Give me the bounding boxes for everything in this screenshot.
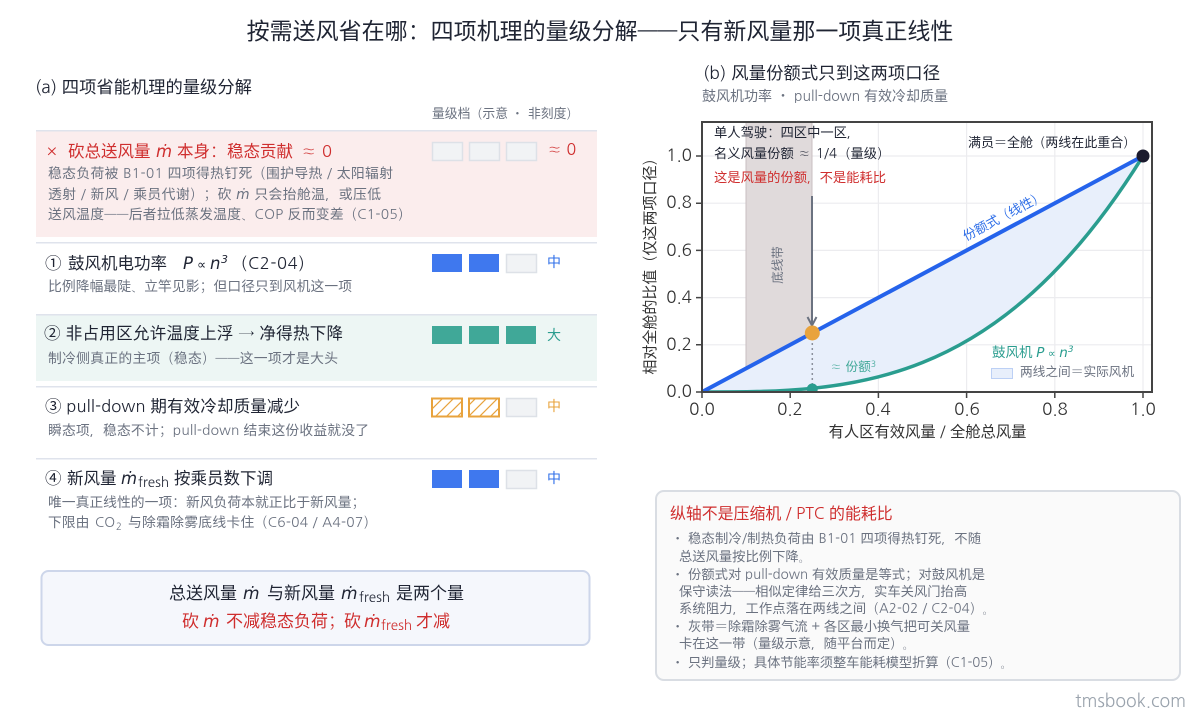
callout: two different airflows: 砍	[182, 613, 199, 630]
notes panel	[656, 491, 1180, 680]
row 0: cutting total airflow: 透射 / 新风 / 乘员代谢）；砍 ṁ 只会抬舱温，或压低	[48, 183, 381, 203]
ticks	[696, 156, 1143, 398]
share line	[702, 156, 1143, 392]
row 1: blower power: （C2-04）	[232, 255, 314, 272]
row 1: blower power: 3	[221, 253, 228, 266]
annotation: share cubed: ≈ 份额	[830, 360, 871, 373]
dotted guide	[811, 333, 813, 392]
row 1: blower power: 中	[547, 255, 561, 270]
callout: two different airflows	[42, 571, 590, 645]
panel a: mechanism breakdown	[35, 78, 597, 532]
row 4: fresh air: ṁ	[121, 469, 137, 488]
panel b subtitle: ·	[776, 86, 790, 106]
chart: airflow share vs ratio	[641, 122, 1156, 440]
callout: two different airflows: 是两个量	[396, 584, 464, 602]
notes panel: ·	[671, 564, 684, 583]
row 4: fresh air: 唯一真正线性的一项：新风负荷本就正比于新风量；	[48, 491, 365, 511]
y tick labels: 0.8	[666, 194, 692, 211]
x tick labels: 0.0	[689, 401, 715, 418]
annotation: share cubed: 3	[871, 360, 876, 369]
blower curve	[702, 156, 1143, 392]
annotation: single driver: ≈	[798, 147, 810, 160]
annotation: full cabin: 满员＝全舱（两线在此重合）	[968, 132, 1135, 151]
row 2: unoccupied zone temperature	[36, 314, 597, 381]
notes panel: ·	[671, 616, 684, 635]
title: 按需送风省在哪：四项机理的量级分解——只有新风量那一项真正线性	[247, 12, 953, 46]
panel a heading: (a) 四项省能机理的量级分解	[35, 78, 252, 96]
annotation: single driver: （量级）	[838, 146, 890, 160]
y axis label: 相对全舱的比值（仅这两项口径）	[641, 151, 658, 375]
legend: 两线之间＝实际风机	[1020, 361, 1134, 380]
notes panel: ·	[671, 652, 684, 671]
panel b heading: (b) 风量份额式只到这两项口径	[703, 64, 940, 82]
x axis label: 有人区有效风量 / 全舱总风量	[829, 423, 1026, 440]
row 1: blower power: 比例降幅最陡、立竿见影；但口径只到风机这一项	[48, 275, 352, 295]
row 0: cutting total airflow: 稳态负荷被 B1-01 四项得热钉死（围护导热 / 太阳辐射	[48, 165, 393, 181]
row 4: fresh air	[36, 458, 597, 532]
row 4: fresh air: fresh	[138, 475, 169, 489]
row 3: pull-down	[36, 386, 597, 439]
marker: share point	[805, 326, 820, 340]
row 4: fresh air: 新风量	[67, 469, 116, 487]
callout: two different airflows: 不减稳态负荷	[226, 612, 328, 630]
x tick labels: 0.8	[1042, 401, 1068, 418]
row 0: cutting total airflow	[36, 130, 597, 237]
row 4: fresh air: ④	[45, 471, 62, 487]
annotation: single driver: 名义风量份额	[714, 147, 794, 160]
row 0: cutting total airflow: 稳态贡献	[227, 142, 293, 160]
notes panel: 系统阻力，工作点落在两线之间（A2-02 / C2-04）。	[679, 601, 995, 616]
x tick labels	[689, 401, 1156, 418]
panel b subtitle: pull-down	[794, 89, 860, 104]
row 1: blower power: 鼓风机电功率	[68, 254, 167, 272]
callout: two different airflows: ṁ	[341, 584, 358, 604]
x tick labels: 0.2	[777, 401, 803, 418]
annotation: single driver: 单人驾驶：四区中一区，	[714, 122, 859, 141]
row 0: cutting total airflow: ×	[47, 144, 57, 160]
area between curves	[702, 156, 1143, 392]
notes panel: 灰带＝除霜除雾气流 + 各区最小换气把可关风量	[688, 616, 970, 635]
line label: share formula: 份额式（线性）	[961, 189, 1046, 244]
curve label: blower: 3	[1068, 345, 1074, 355]
scale column caption: 非刻度）	[528, 106, 578, 120]
notes panel: 卡在这一带（量级示意，随平台而定）。	[679, 635, 915, 651]
row 1: blower power: P	[183, 254, 193, 273]
row 1: blower power: n	[210, 254, 220, 273]
notes panel: 稳态制冷/制热负荷由 B1-01 四项得热钉死，不随	[688, 530, 981, 546]
y tick labels: 0.2	[666, 336, 692, 353]
panel b subtitle: 有效冷却质量	[864, 89, 948, 104]
x tick labels: 1.0	[1130, 401, 1156, 418]
y tick labels: 0.0	[666, 383, 692, 400]
callout: two different airflows: fresh	[359, 590, 390, 604]
row 4: fresh air: 与除霜除雾底线卡住（C6-04 / A4-07）	[128, 515, 377, 530]
annotation: single driver: 这是风量的份额，不是能耗比	[714, 169, 886, 185]
row 0: cutting total airflow: ≈ 0	[547, 142, 576, 158]
callout: two different airflows: 与新风量	[267, 584, 335, 602]
notes panel: 份额式对 pull-down 有效质量是等式；对鼓风机是	[688, 564, 985, 583]
x tick labels: 0.6	[954, 401, 980, 418]
row 2: unoccupied zone temperature: ② 非占用区允许温度上浮 → 净得热下降	[44, 324, 343, 342]
y tick labels	[666, 147, 692, 400]
notes panel: ·	[671, 528, 684, 547]
callout: two different airflows: 总送风量	[169, 585, 237, 602]
grey band: minimum airflow floor: 底线带	[770, 246, 784, 284]
callout: two different airflows: 才减	[416, 612, 450, 630]
row 3: pull-down: ③ pull-down 期有效冷却质量减少	[45, 397, 300, 415]
grey band: minimum airflow floor	[746, 122, 812, 392]
row 4: fresh air: CO	[95, 515, 115, 529]
arrow to operating point	[808, 196, 816, 326]
row 4: fresh air: 按乘员数下调	[174, 469, 273, 487]
annotation: single driver: 1/4	[816, 147, 837, 160]
panel b subtitle: 鼓风机功率	[702, 90, 772, 104]
curve label: blower: 鼓风机 P ∝ n	[992, 345, 1068, 361]
axes frame	[702, 122, 1152, 392]
callout: two different airflows: ；	[328, 607, 345, 632]
row 1: blower power	[36, 242, 597, 295]
notes panel: 纵轴不是压缩机 / PTC 的能耗比	[670, 505, 893, 522]
row 0: cutting total airflow: ：	[210, 138, 226, 162]
row 3: pull-down: 中	[547, 399, 561, 414]
callout: two different airflows: ṁ	[203, 612, 220, 632]
row 2: unoccupied zone temperature: 大	[547, 328, 561, 343]
notes panel: 总送风量按比例下降。	[679, 549, 811, 564]
row 0: cutting total airflow: 砍总送风量	[68, 142, 150, 160]
row 0: cutting total airflow: 送风温度——后者拉低蒸发温度、COP 反而变差（C1-05）	[48, 207, 411, 222]
callout: two different airflows: ṁ	[243, 584, 260, 604]
scale column caption: 量级档（示意	[432, 107, 508, 120]
notes panel: 保守读法——相似定律给三次方，实车关风门抬高	[679, 583, 967, 599]
scale column caption: ·	[511, 103, 524, 122]
row 4: fresh air: 下限由	[48, 515, 89, 529]
callout: two different airflows: ṁ	[364, 612, 381, 632]
row 4: fresh air: 2	[116, 523, 122, 532]
notes panel: 只判量级；具体节能率须整车能耗模型折算（C1-05）。	[688, 652, 1013, 671]
y tick labels: 1.0	[666, 147, 692, 164]
y tick labels: 0.4	[666, 289, 692, 306]
y tick labels: 0.6	[666, 242, 692, 259]
row 0: cutting total airflow: 本身	[177, 142, 210, 160]
row 2: unoccupied zone temperature: 制冷侧真正的主项（稳态）——这一项才是大头	[48, 350, 338, 366]
marker: cubic point	[807, 384, 818, 391]
callout: two different airflows: 砍	[344, 612, 361, 630]
annotation: single driver	[714, 122, 890, 185]
row 1: blower power: ①	[45, 256, 62, 272]
x tick labels: 0.4	[865, 401, 891, 418]
watermark: tmsbook.com	[1075, 692, 1186, 710]
marker: full cabin	[1136, 150, 1150, 162]
row 4: fresh air: 中	[547, 471, 561, 486]
row 3: pull-down: 瞬态项，稳态不计；pull-down 结束这份收益就没了	[48, 419, 369, 439]
row 0: cutting total airflow: ṁ	[156, 142, 172, 161]
callout: two different airflows: fresh	[381, 618, 412, 632]
row 0: cutting total airflow: ≈	[301, 144, 317, 160]
row 1: blower power: ∝	[197, 258, 206, 273]
row 0: cutting total airflow: 0	[322, 144, 332, 160]
